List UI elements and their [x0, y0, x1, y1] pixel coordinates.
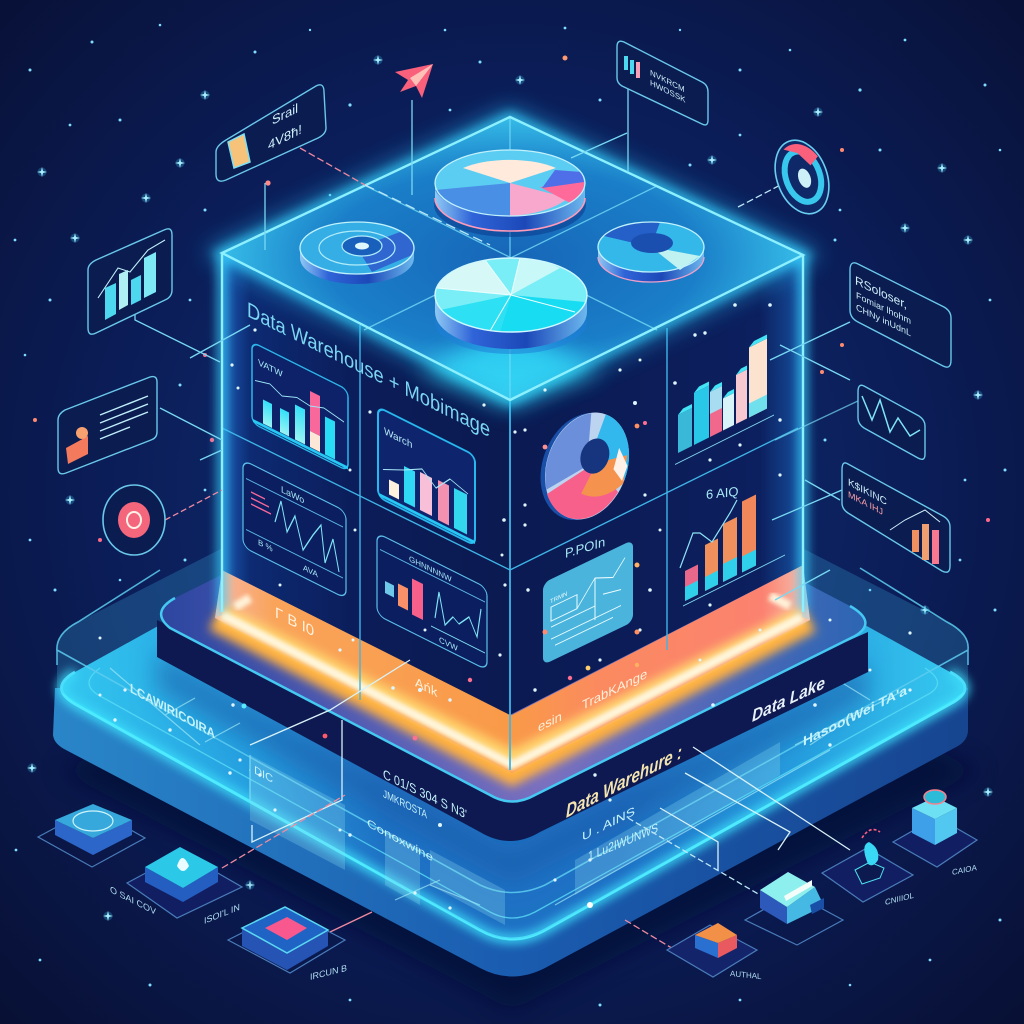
panel: left face chart 4	[377, 533, 487, 670]
band labels	[275, 605, 647, 735]
label: panel caption: P.POIn	[565, 534, 605, 561]
panel: left face chart 1: VATW	[258, 357, 283, 380]
node: cyan drop: CNIIIOL	[885, 891, 914, 907]
glowing orange rim	[215, 565, 810, 773]
node: flame box: ISOI'L IN	[204, 902, 240, 926]
platform inner rim	[89, 668, 938, 918]
node: cyan drop	[822, 830, 914, 907]
platform labels: . DIC	[248, 761, 274, 786]
panel: left bar card	[88, 229, 172, 334]
rim white-hot edge	[222, 615, 802, 765]
slab cast shadow	[157, 650, 868, 885]
node: flame box	[110, 847, 242, 926]
text: chip card label: 4V8ħ!	[268, 122, 302, 153]
panel: left face chart 3: AVA	[303, 562, 318, 579]
bar chart: right face lower: 6 AIQ	[706, 484, 738, 502]
panel: left face chart 4: GHNNNNW	[409, 553, 452, 584]
panel: light blue schematic: TRMN	[550, 590, 568, 606]
glass layer over platform	[57, 400, 968, 939]
panel: left face chart 3: LaWo	[281, 484, 304, 506]
node: orange block: AUTHAL	[730, 969, 762, 981]
panel: top right data card	[617, 41, 708, 125]
cube edges	[222, 117, 803, 612]
panel: left lower card	[58, 377, 157, 474]
label: slab code: C 01/S 304 S N3'	[383, 767, 467, 822]
band labels: esin	[538, 709, 562, 735]
disc back: multi-colour pie	[434, 150, 586, 237]
panel: right line chart card	[858, 385, 925, 459]
panel: left face chart 2	[378, 407, 475, 546]
label: Data Lake: Data Lake	[752, 672, 825, 726]
node: coral chip: IRCUN B	[310, 963, 347, 982]
node: orange block	[667, 923, 762, 981]
slab labels	[383, 672, 825, 823]
label: slab sub code: JMKROSTA	[383, 788, 427, 821]
panel: left face chart 1	[252, 342, 348, 471]
platform shadow	[60, 560, 980, 1010]
slab rim	[161, 598, 865, 802]
icon: left target circle	[103, 485, 165, 555]
icon: chip	[228, 134, 250, 168]
platform side wall	[53, 688, 968, 976]
panel: top left chip card	[216, 85, 326, 181]
connector lines	[135, 88, 860, 950]
cube outer wide glow	[222, 117, 803, 400]
panel: right metrics card: K$IKINC	[848, 477, 887, 508]
node: coral chip	[228, 907, 347, 982]
panel: right metrics card: MKA IHJ	[848, 489, 883, 518]
panel: right text card: RSoloser,	[855, 274, 907, 312]
slab top face	[161, 430, 865, 802]
platform labels: Conoxwine	[367, 817, 434, 865]
platform labels: U . AINS	[582, 803, 635, 844]
panel: top right data card: NVKRCM	[650, 67, 685, 94]
panel: right text card: Fomiar lhohm	[856, 290, 911, 327]
panel: right text card	[850, 263, 951, 367]
node: shield box	[38, 804, 145, 867]
node: flame box: O SAI COV	[110, 884, 157, 918]
platform labels: Hasoo(Wei TA'a	[803, 683, 907, 749]
band labels: Ańk	[415, 675, 437, 700]
icon: pie chart on right face	[526, 399, 643, 533]
icon: coral figures	[66, 436, 88, 464]
disc front: cyan pie	[435, 258, 587, 354]
panel: top right data card: HWOSSK	[650, 77, 686, 105]
panel: left face chart 3: B %	[258, 537, 273, 554]
cube lower glass extension	[215, 565, 810, 620]
platform circuit lines	[110, 660, 905, 905]
top glow	[420, 325, 600, 400]
panel: left face chart 4: CVW	[439, 634, 458, 653]
platform labels: 1 Lu2IWUNWS	[588, 820, 658, 864]
particles on cube	[230, 303, 782, 740]
disc left: radial dial	[300, 222, 414, 284]
node: cyan cube	[893, 790, 977, 877]
glass layer outline	[57, 568, 968, 892]
cube top face	[222, 117, 803, 400]
platform labels	[130, 680, 907, 865]
platform glowing top face	[62, 430, 965, 939]
cube right face	[510, 255, 803, 715]
bar chart: right face lower	[680, 480, 785, 606]
slab side	[157, 620, 868, 841]
text: chip card label: Srail	[272, 101, 298, 128]
panel: right metrics card	[842, 463, 950, 572]
middle slab	[157, 430, 868, 841]
orange band	[215, 565, 810, 773]
node: cyan cube: CAIOA	[952, 863, 977, 877]
panel: left face chart 2: Warch	[384, 426, 413, 451]
glass internal columns	[250, 742, 780, 925]
glass cube	[215, 117, 810, 770]
icon: gauge circle top right	[766, 133, 838, 221]
label: Data Warehouse: Data Warehure :	[566, 742, 682, 823]
platform labels: LCAWIRICOIRA	[130, 680, 215, 742]
top face grid	[364, 117, 657, 400]
cube outer glow	[222, 117, 803, 610]
panel: light blue schematic	[543, 540, 633, 665]
band labels: TrabKAnge	[582, 666, 647, 713]
platform glowing rim	[62, 672, 965, 939]
outer data lake platform	[53, 400, 968, 976]
band labels: Γ B I0	[275, 605, 314, 640]
disc right: donut	[598, 222, 704, 282]
panel: right text card: CHNy inUdnL	[856, 302, 911, 339]
cube face dividers	[222, 325, 798, 770]
cube title text: Data Warehouse + Mobimage	[247, 297, 490, 442]
rim yellow edge	[222, 612, 802, 758]
disc shadow	[434, 173, 586, 237]
cube left face	[222, 253, 510, 715]
bar chart: right face upper	[675, 331, 774, 464]
node: server box	[745, 872, 843, 945]
icon: rocket	[395, 64, 433, 98]
panel: left face chart 3	[243, 460, 346, 598]
text: chip card label	[268, 101, 302, 153]
rim inner white	[235, 596, 790, 607]
particles on platform	[98, 618, 912, 910]
rim glow halo	[215, 618, 810, 772]
